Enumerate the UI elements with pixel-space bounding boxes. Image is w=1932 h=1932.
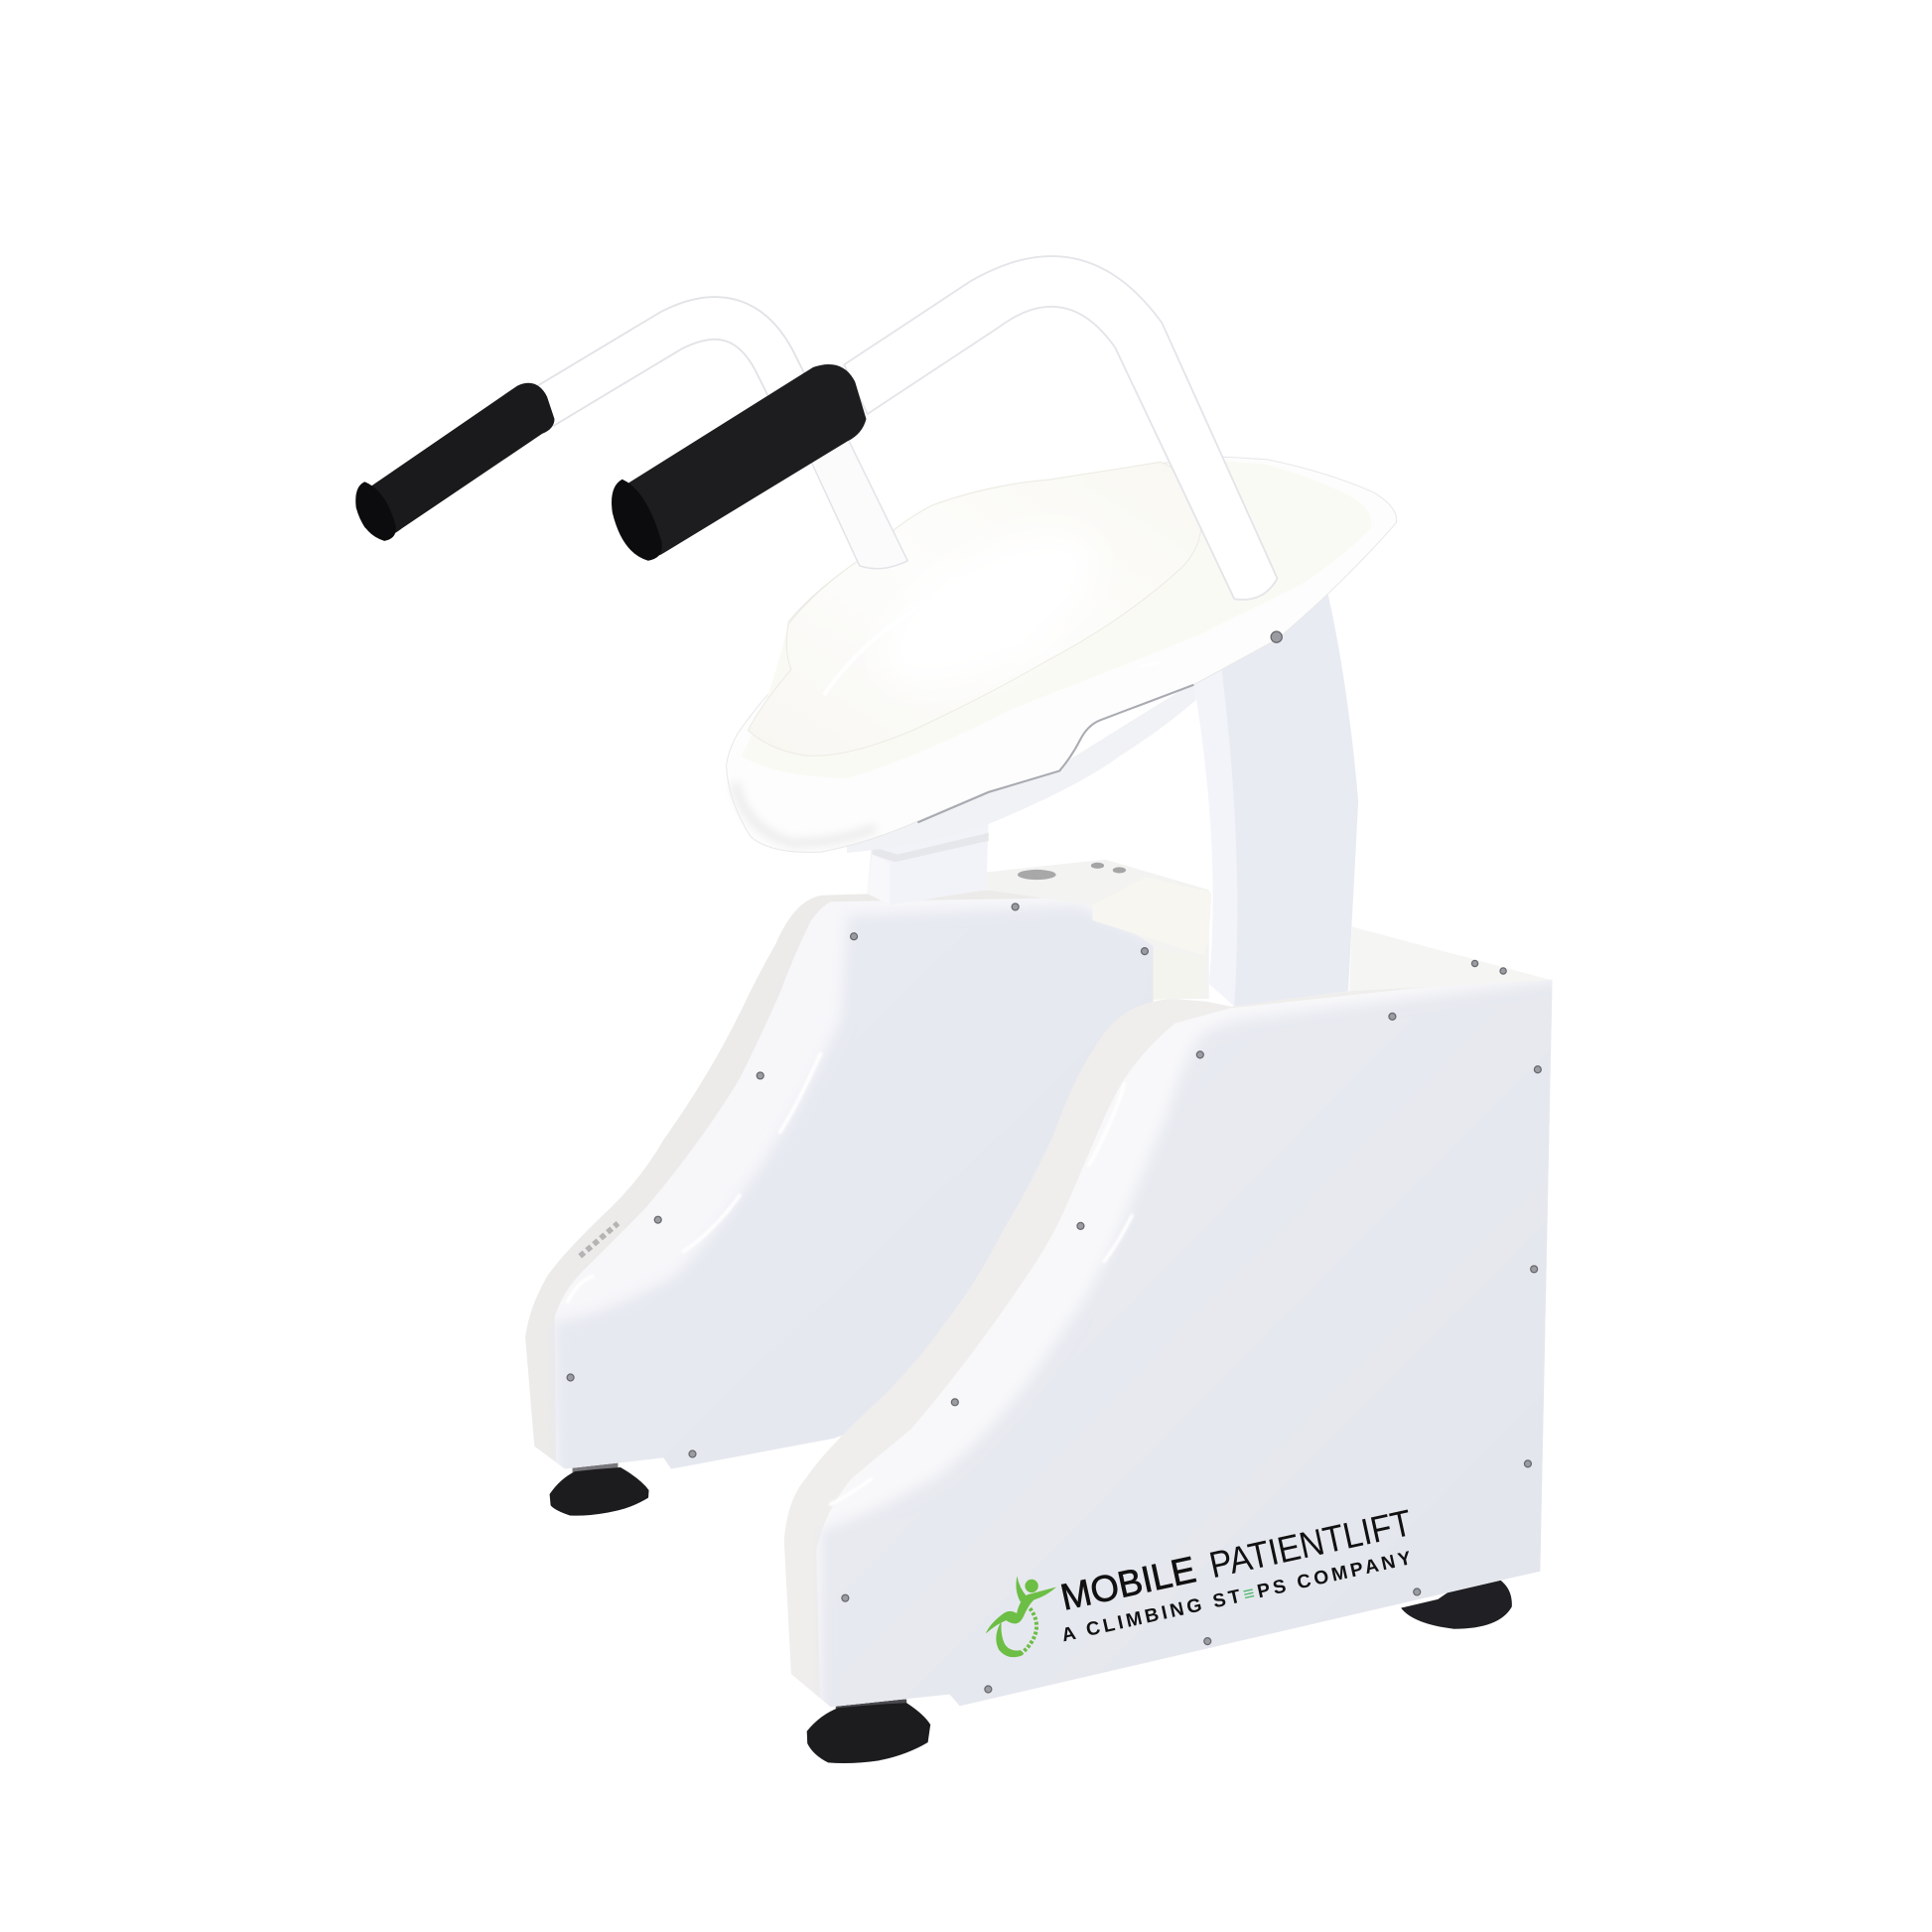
rear handle grip: [355, 383, 554, 541]
cross bar and top plate: [986, 860, 1211, 1000]
seat hump: [749, 462, 1201, 756]
logo wordmark: PATIENTLIFT: PATIENTLIFT: [1205, 1501, 1416, 1586]
product illustration: patient lift: [355, 255, 1553, 1763]
logo icon: green figure in wheelchair: [986, 1576, 1056, 1657]
rim shading: [736, 786, 872, 843]
logo wordmark: MOBILE: MOBILE: [1057, 1548, 1199, 1618]
rear handle tube: [542, 318, 816, 444]
front base housing: [784, 973, 1575, 1737]
front foot: [807, 1700, 930, 1763]
gloss streaks: [567, 1053, 820, 1302]
rear base housing: [525, 891, 1165, 1489]
seat lower shell: [847, 682, 1196, 853]
rear foot: [550, 1461, 649, 1516]
main curved column: [1193, 594, 1358, 1007]
gloss streaks: [831, 1084, 1132, 1504]
short seat post: [867, 816, 989, 905]
logo tagline: A CLIMBING ST≡PS COMPANY: [1060, 1548, 1414, 1646]
front handle grip: [612, 364, 866, 561]
front base top surface: [1349, 926, 1554, 1001]
mounting screws: [567, 631, 1541, 1693]
front tube: [844, 256, 1278, 600]
right foot: [1401, 1574, 1512, 1629]
rear tube lower section: [797, 432, 907, 569]
parting line: [917, 685, 1193, 822]
seat tray: [742, 461, 1371, 778]
seat rim: [727, 457, 1397, 852]
seat assembly: [727, 432, 1397, 853]
